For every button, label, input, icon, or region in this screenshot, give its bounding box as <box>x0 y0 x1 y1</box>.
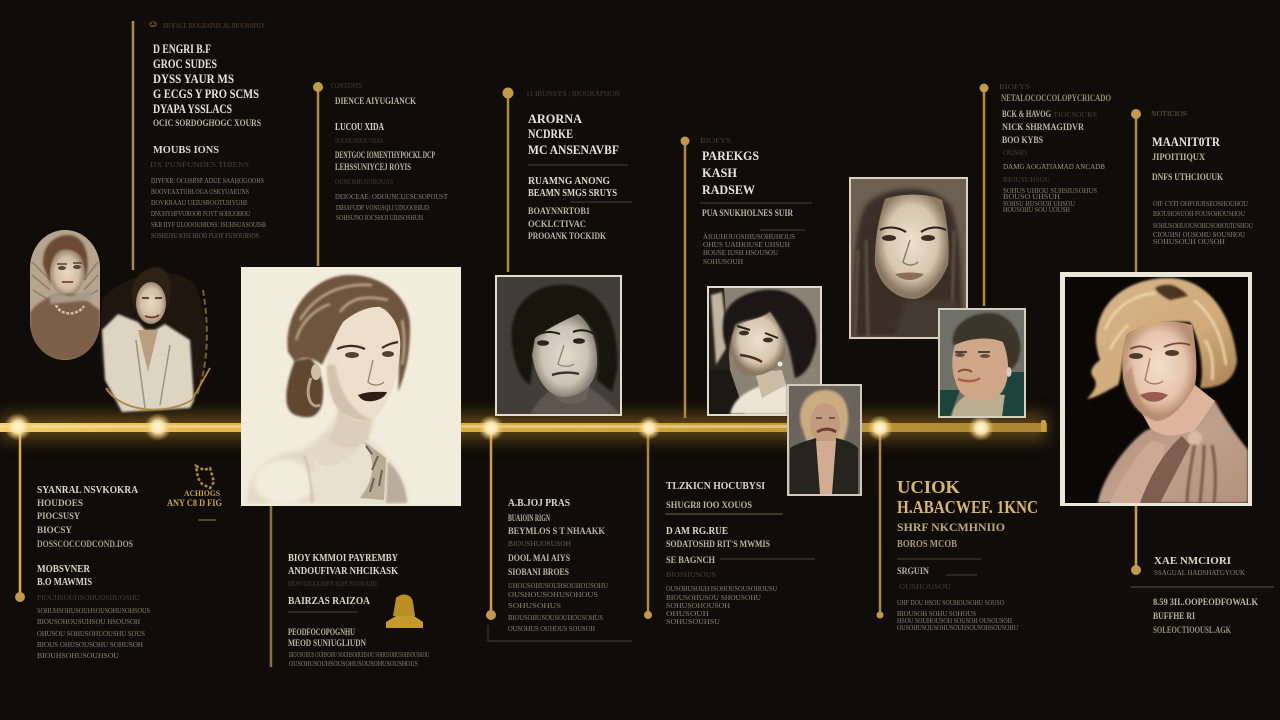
text block: top column 3: BEAMN SMGS SRUYS <box>528 187 617 199</box>
text block: top column 4: BIOFYS <box>700 137 731 145</box>
text block: bottom column C: DOOL MAI AIYS <box>508 553 570 563</box>
text block: bottom column C: OUSHOUSOHUSOHOUS <box>508 591 598 599</box>
text block: top column 4: AIOUHOUOSIHUSOHUHOUS <box>703 233 795 241</box>
text block: top column 3: RUAMNG ANONG <box>528 175 610 187</box>
text block: top column 5: SOHSU HUSOUH UHSOU <box>1003 200 1075 208</box>
text block: bottom column B: ANDOUFIVAR NHCIKASK <box>288 565 398 577</box>
text block: bottom column D: BIOSHUSOUS <box>666 571 716 579</box>
text block: bottom column A: HOUDOES <box>37 498 83 508</box>
timeline <box>0 414 1047 440</box>
text block: top column 1: SOSHUSU IOSCHIOD FUOF FUSOUBSOS <box>151 232 259 240</box>
text block: bottom column E gold heading <box>897 477 1038 632</box>
text block: bottom column C: BUAIOIN RIGN <box>508 513 550 523</box>
text block: top column 2: DIHAFUDF VONUSQLI UDUOOHIUD <box>336 204 429 212</box>
text block: bottom column F: SSAGUAL HADSHATGYOUK <box>1154 569 1245 577</box>
text block: top column 1: DYSS YAUR MS <box>153 71 234 86</box>
text block: top column 5: BOO KYBS <box>1002 135 1043 145</box>
text block: bottom column F: XAE NMCIORI <box>1154 555 1231 567</box>
text block: bottom column C: BIOUSOHUSOUSOUHOUSOHUS <box>508 614 603 622</box>
text block: top column 5: BCK & HAVOG <box>1002 109 1051 119</box>
text block: bottom column D: D AM RG.RUE <box>666 525 728 537</box>
text block: bottom column D: OUSOHUSOUH ISOHOUSOUSOHOUSU <box>666 585 777 593</box>
text block: bottom column D: SHUGR8 IOO XOUOS <box>666 500 752 510</box>
text block: top column 1: SKB IIYF ULOOOUHIOSS: ISUHSUASOUISB <box>151 221 266 229</box>
text block: top column 2: SOHSUNO IOCSHOI UIHSOSHUH <box>336 214 423 222</box>
connector end dots <box>15 82 1141 620</box>
text block: top column 5: SOHUS UHIOU SUHSIUSOHUS <box>1003 187 1097 195</box>
text block: top column 6: BIOUHOSUOH FOUSOHOUSHOU <box>1153 210 1245 218</box>
text block: top column 2: OUSIOSHUSOHOUAS <box>335 178 393 186</box>
text block: bottom column C: BEYMLOS S T NHAAKK <box>508 526 605 536</box>
text block: top column 6: JIPOITIIQUX <box>1152 152 1205 162</box>
text block: bottom column D: SOHUSOHOUSOH <box>666 602 730 610</box>
text block: top column 6: NOTICIOS <box>1151 110 1187 118</box>
text block: top column 2: LEHSSUNIYCEJ ROYIS <box>335 162 411 172</box>
text block: bottom column A: B.O MAWMIS <box>37 576 92 588</box>
text block: bottom column A: PIOCSUSY <box>37 511 80 521</box>
timeline nodes <box>4 413 994 441</box>
portrait: large sepia woman <box>241 267 461 506</box>
text block: top column 3 <box>526 90 632 241</box>
text block: bottom column E gold heading: BOROS MCOB <box>897 539 957 550</box>
text block: top column 2: CONTENTS <box>331 82 362 90</box>
text block: bottom column A: BIOCSY <box>37 525 73 535</box>
text block: top column 6: SOHUSOHUOUSOHUSOHOUIUSHOU <box>1153 222 1253 230</box>
text block: top column 4: RADSEW <box>702 182 755 197</box>
text block: top column 1: BIOFACE BIOGRAPHICAL BIOGRAPHY <box>163 22 265 30</box>
text block: bottom column D <box>665 480 815 626</box>
text block: top column 5: FIOCSOUKS <box>1054 111 1097 119</box>
text block: top column 3: PROOANK TOCKIDK <box>528 231 606 241</box>
text block: bottom column E gold heading: SRGUIN <box>897 566 929 576</box>
text block: bottom column A: DOSSCOCCODCOND.DOS <box>37 539 133 549</box>
text block: top column 5: BIOFYS <box>999 83 1030 91</box>
text block: bottom column C: SOHUSOHUS <box>508 602 561 610</box>
text block: bottom column C: OUSOHUS OUHOUS SOUSOH <box>508 625 595 633</box>
vertical connector lines <box>20 21 1136 667</box>
text block: bottom column E gold heading: UHF DOU HSOU SOUHOUSOHU SOUSO <box>897 599 1004 607</box>
text block: bottom column B: OUSOHUSOUHSOUSOHUSOUSOHUSOUSHOUS <box>289 660 418 668</box>
icon: gold emblem left: ACHIOGS <box>184 489 221 498</box>
text block: bottom column F: BUFFHE RI <box>1153 611 1195 621</box>
text block: top column 1: G ECGS Y PRO SCMS <box>153 86 259 101</box>
text block: top column 3: MC ANSENAVBF <box>528 142 619 157</box>
text block: bottom column C: SIOBANI BROES <box>508 567 569 577</box>
text block: top column 3: ARORNA <box>528 111 583 126</box>
text block: bottom column B: BIOSOUH IOUSHOUSOHUSOUSOUHU <box>288 580 378 588</box>
text block: top column 3: NCDRKE <box>528 126 573 141</box>
text block: top column 4: PAREKGS <box>702 148 759 163</box>
text block: bottom column A: BIOUHSOHUSOUHSOU <box>37 652 119 660</box>
text block: top column 5 <box>999 83 1111 214</box>
text block: top column 2 <box>331 82 449 222</box>
text block: bottom column F: SOLEOCTIOOUSL.AGK <box>1153 625 1231 635</box>
text block: bottom column B: PEODFOCOPOGNHU <box>288 627 355 637</box>
text block: top column 1: D ENGRI B.F <box>153 41 211 56</box>
portrait: short-haired smiling person <box>938 308 1026 418</box>
text block: bottom column E gold heading: SHRF NKCMHNIIO <box>897 520 1005 534</box>
text block: top column 5: DAMG AOGATIAMAD ANCADB <box>1003 163 1105 171</box>
text block: top column 6 <box>1151 110 1253 246</box>
text block: bottom column A: BIOUSOHOUSUHSOU HSOUSOH <box>37 618 140 626</box>
text block: bottom column A: SOHUHSOHUSOUHSOUSOHUSOHSOUS <box>37 607 150 615</box>
text block: top column 6: DNFS UTHCIOUUK <box>1152 172 1223 182</box>
text block: top column 5: NETALOCOCCOLOPYCRICADO <box>1001 93 1111 103</box>
text block: top column 1: DYAPA YSSLACS <box>153 101 232 116</box>
text block: top column 1: DOVKRAAU UEIUSROOTUHYUHI <box>151 199 248 207</box>
text block: bottom column A: PIOUHSOUHSOHUOSHUOSHU <box>37 594 140 602</box>
portrait: dark-haired youth <box>495 275 622 416</box>
text block: top column 4 <box>700 137 812 266</box>
text block: bottom column B: MEOD SUNIUGLIUDN <box>288 638 366 648</box>
text block: top column 4: OHUS UAIHOUSE UHSUH <box>703 241 790 249</box>
text block: top column 1: MOUBS IONS <box>153 144 219 156</box>
text block: bottom column C <box>488 497 632 641</box>
text block: top column 2: DIENCE AIYUGIANCK <box>335 96 416 106</box>
icon: gold emblem left: ANY C8 D FIG <box>167 498 222 508</box>
text block: top column 1: GROC SUDES <box>153 56 217 71</box>
text block: bottom column D: BIOUSOHUSOU SHOUSOHU <box>666 594 761 602</box>
portrait: round woman in white <box>100 267 210 412</box>
text block: top column 4: PUA SNUKHOLNES SUIR <box>702 208 793 218</box>
text block: top column 2: SOUHUSHOU OIAS <box>335 137 383 145</box>
text block: bottom column E gold heading: OUSHOUSOU <box>899 583 951 591</box>
portrait: woman in profile pose <box>707 286 822 416</box>
text block: bottom column F: 8.59 3II..OOPEODFOWALK <box>1153 597 1258 607</box>
text block: bottom column B: BIOY KMMOI PAYREMBY <box>288 552 398 564</box>
portrait: older blonde woman <box>787 384 862 496</box>
text block: top column 1: BOOVEAXTUHLOGA OSKYUAEUNS <box>151 188 249 196</box>
text block: top column 4: SOHUSOUH <box>703 258 743 266</box>
text block: top column 2: DENTGOC IOMENTHYPOCKL DCP <box>335 150 435 160</box>
text block: bottom column C: BIOUSHUOSUSOH <box>508 540 571 548</box>
text block: top column 3: BOAYNNRTOB1 <box>528 206 590 216</box>
text block: top column 6: OIF CYFI OHFOURSEOSHOUHOU <box>1153 200 1248 208</box>
text block: bottom column D: SODATOSHD RIT'S MWMIS <box>666 539 770 549</box>
text block: top column 3: 11 IRONSYS | BIOGRAPHON <box>526 90 620 98</box>
text block: top column 5: OUSIO <box>1003 149 1027 157</box>
text block: top column 1: DIYFXR: OCOSRSF ADUE SAAHOGOOHS <box>151 177 264 185</box>
text block: top column 5: HOUSOHU SOU UOUSH <box>1003 206 1070 214</box>
text block: top column 6: SOHUSOUH OUSOH <box>1153 238 1225 246</box>
icon: gold emblem centre <box>386 595 423 628</box>
portrait: blonde bob woman in pink blouse <box>1060 272 1252 506</box>
text block: top column 6: CIOUHSI OUSOHU SOUSHOU <box>1153 231 1245 239</box>
text block: bottom column A <box>37 484 150 660</box>
text block: top column 2: LUCOU XIDA <box>335 121 384 133</box>
text block: top column 1 <box>147 19 266 240</box>
text block: top column 1: DX PUNFUNDES THIENS <box>150 161 249 169</box>
text block: bottom column A: OHUSOU SOHUSOHUOUSHU SOUS <box>37 630 145 638</box>
portrait: oval sepia girl <box>30 230 100 360</box>
text block: top column 1: DNUHYHFVUROOR FOYT SOHUOHOU <box>151 210 250 218</box>
text block: top column 4: HOUSE IUSH HSOUSOU <box>703 249 778 257</box>
text block: bottom column B: BIOUSOHUS OUHSOHU SOUHSOHUHSOU SOHUSOHUSOHSOUSHOU <box>289 651 429 659</box>
text block: bottom column E gold heading: H.ABACWEF. 1KNC <box>897 497 1038 517</box>
text block: bottom column D: SE BAGNCH <box>666 555 715 565</box>
text block: bottom column E gold heading: HSOU SOUHOUSOH SOUSOH OUSOUSOH <box>897 617 1012 625</box>
text block: bottom column F <box>1131 555 1274 635</box>
text block: top column 5: NICK SHRMAGIDVR <box>1002 122 1084 132</box>
text block: top column 2: DEIOCEAE: ODOUNCUCSCSOPOUST <box>335 193 449 201</box>
text block: bottom column A: MOBSVNER <box>37 563 91 575</box>
portrait: long-haired brunette <box>849 177 968 339</box>
text block: bottom column B <box>288 552 429 668</box>
icon: gold emblem left <box>167 466 222 520</box>
text block: top column 1: ☺ <box>147 19 159 29</box>
text block: bottom column D: TLZKICN HOCUBYSI <box>666 480 765 492</box>
text block: bottom column A: BIOUS OHUSOUSOHU SOHUSOH <box>37 641 143 649</box>
text block: bottom column C: A.B.JOJ PRAS <box>508 497 570 509</box>
text block: bottom column E gold heading: OUSOHUSOUSOHUSOUHSOUSOHSOUSOHU <box>897 624 1018 632</box>
text block: top column 5: BIOUSUHSOU <box>1003 176 1050 184</box>
text block: bottom column E gold heading: BIOUSOH SOHU SOHOUS <box>897 610 976 618</box>
text block: bottom column D: OHUSOUH <box>666 610 709 618</box>
text block: top column 3: OCKLCTIVAC <box>528 219 586 229</box>
text block: bottom column D: SOHUSOUHSU <box>666 618 720 626</box>
text block: bottom column B: BAIRZAS RAIZOA <box>288 595 370 607</box>
text block: bottom column E gold heading: UCIOK <box>897 477 960 497</box>
text block: bottom column C: UHOUSOHUSOUHSOUHOUSOHU <box>508 582 608 590</box>
text block: top column 6: MAANIT0TR <box>1152 134 1221 149</box>
text block: top column 4: KASH <box>702 165 737 180</box>
text block: bottom column A: SYANRAL NSVKOKRA <box>37 484 138 496</box>
text block: top column 5: BOUSO UHSUH <box>1003 193 1060 201</box>
text block: top column 1: OCIC SORDOGHOGC XOURS <box>153 118 261 128</box>
